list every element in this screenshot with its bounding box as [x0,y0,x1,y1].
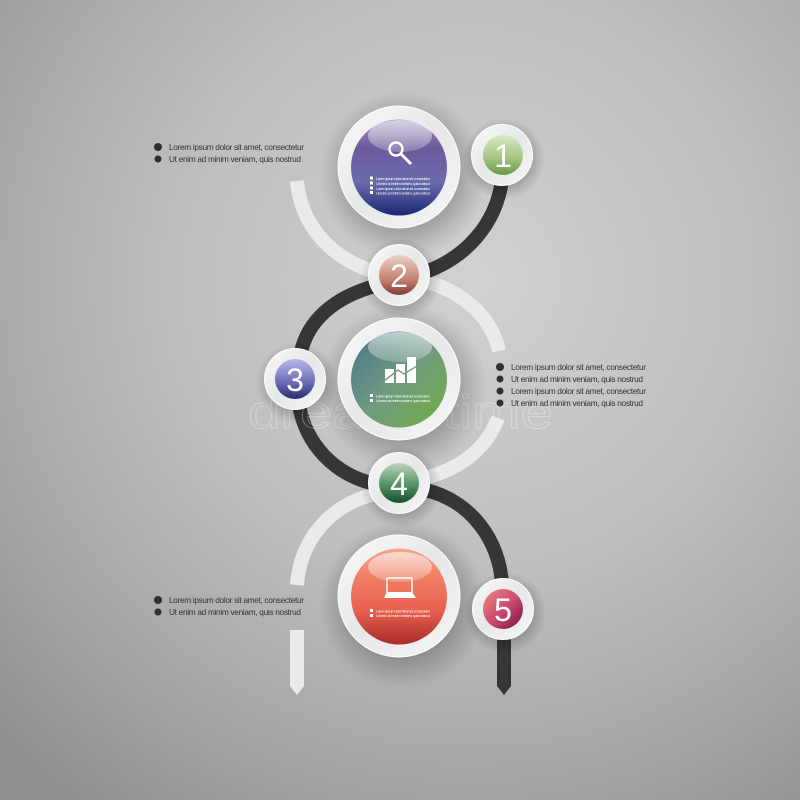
badge 2 [360,238,442,320]
badge 1 [463,118,545,200]
icon: bar chart [384,357,417,383]
icon: magnifier [390,142,411,164]
badge 1: 1 [494,138,512,174]
text block: middle right: Lorem ipsum dolor sit amet, consectetur [511,386,646,396]
mini list: Ut enim ad minim veniam, quis nostrud [376,181,430,186]
text block: middle right: Lorem ipsum dolor sit amet, consectetur [511,362,646,372]
text block: top left: Lorem ipsum dolor sit amet, consectetur [169,142,304,152]
mini list: Lorem ipsum dolor sit amet, consectetur [376,394,431,398]
mini list: Lorem ipsum dolor sit amet, consectetur [376,176,431,181]
badge 3 [256,342,338,424]
light ribbon arrow [290,630,304,695]
text block: top left [154,142,304,164]
mini list: Ut enim ad minim veniam, quis nostrud [376,190,430,196]
watermark: dreamstime [248,386,553,438]
mini list [370,394,431,403]
mini list: Lorem ipsum dolor sit amet, consectetur [376,608,431,614]
light ribbon [290,181,499,695]
badge 4: 4 [390,466,408,502]
icon: laptop [384,578,416,598]
mini list: Ut enim ad minim veniam, quis nostrud [376,398,430,403]
dark ribbon arrow [497,635,511,695]
text block: bottom left: Lorem ipsum dolor sit amet, consectetur [169,595,304,605]
dark ribbon [299,180,511,695]
text block: middle right [496,362,646,408]
text block: middle right: Ut enim ad minim veniam, quis nostrud [511,374,643,384]
badge 2: 2 [390,258,408,294]
panel: step 2 chart circle [319,303,487,471]
mini list: Lorem ipsum dolor sit amet, consectetur [376,186,431,191]
panel: step 3 laptop circle [319,520,487,688]
text block: middle right: Ut enim ad minim veniam, quis nostrud [511,398,643,408]
badge 5 [464,572,546,654]
mini list: Ut enim ad minim veniam, quis nostrud [376,613,430,618]
badge 3: 3 [286,362,304,398]
text block: bottom left: Ut enim ad minim veniam, quis nostrud [169,607,301,617]
mini list [370,608,431,618]
text block: top left: Ut enim ad minim veniam, quis nostrud [169,154,301,164]
badge 5: 5 [494,592,512,628]
mini list [370,176,431,196]
text block: bottom left [154,595,304,617]
badge 4 [360,446,442,528]
panel: step 1 magnifier circle [319,91,487,259]
